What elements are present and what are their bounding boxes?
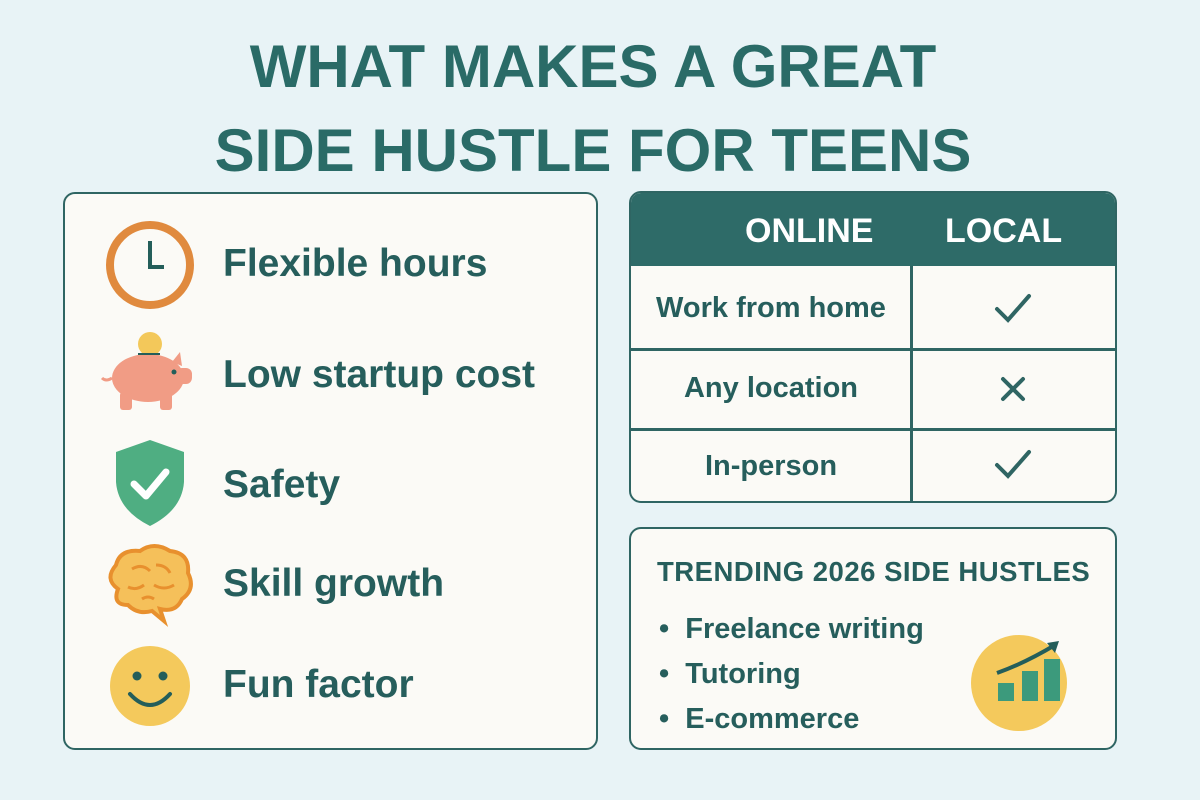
table header: LOCAL: [945, 212, 1062, 250]
title: [215, 33, 971, 184]
text: fun factor: Fun factor: [223, 663, 414, 706]
icon: piggy bank: [101, 332, 192, 410]
text: low startup cost: Low startup cost: [223, 353, 535, 396]
cross mark: [1000, 376, 1026, 402]
heading: TRENDING 2026 SIDE HUSTLES: [657, 556, 1090, 587]
title: SIDE HUSTLE FOR TEENS: [215, 117, 971, 184]
icon: smiley: [110, 646, 190, 726]
panel: online vs local table: [629, 191, 1117, 503]
icon: brain: [108, 544, 193, 627]
title: WHAT MAKES A GREAT: [250, 33, 936, 100]
icon: growth chart: [971, 635, 1067, 731]
icon: clock: [106, 221, 194, 309]
list: • E-commerce: [659, 703, 859, 735]
table header: ONLINE: [745, 212, 873, 250]
list: • Tutoring: [659, 658, 801, 690]
text: flexible hours: Flexible hours: [223, 242, 487, 285]
panel: qualities: [63, 192, 598, 750]
text: skill growth: Skill growth: [223, 562, 444, 605]
table header: [631, 193, 1119, 266]
row: in-person: In-person: [705, 450, 837, 482]
list: • Freelance writing: [659, 613, 924, 645]
check mark: [994, 294, 1032, 323]
text: safety: Safety: [223, 463, 340, 506]
row: any location: Any location: [684, 372, 858, 404]
check mark: [994, 450, 1032, 479]
panel: trending side hustles: [629, 527, 1117, 750]
row: work from home: Work from home: [656, 292, 886, 324]
list: [659, 613, 924, 735]
icon: shield: [116, 440, 184, 526]
